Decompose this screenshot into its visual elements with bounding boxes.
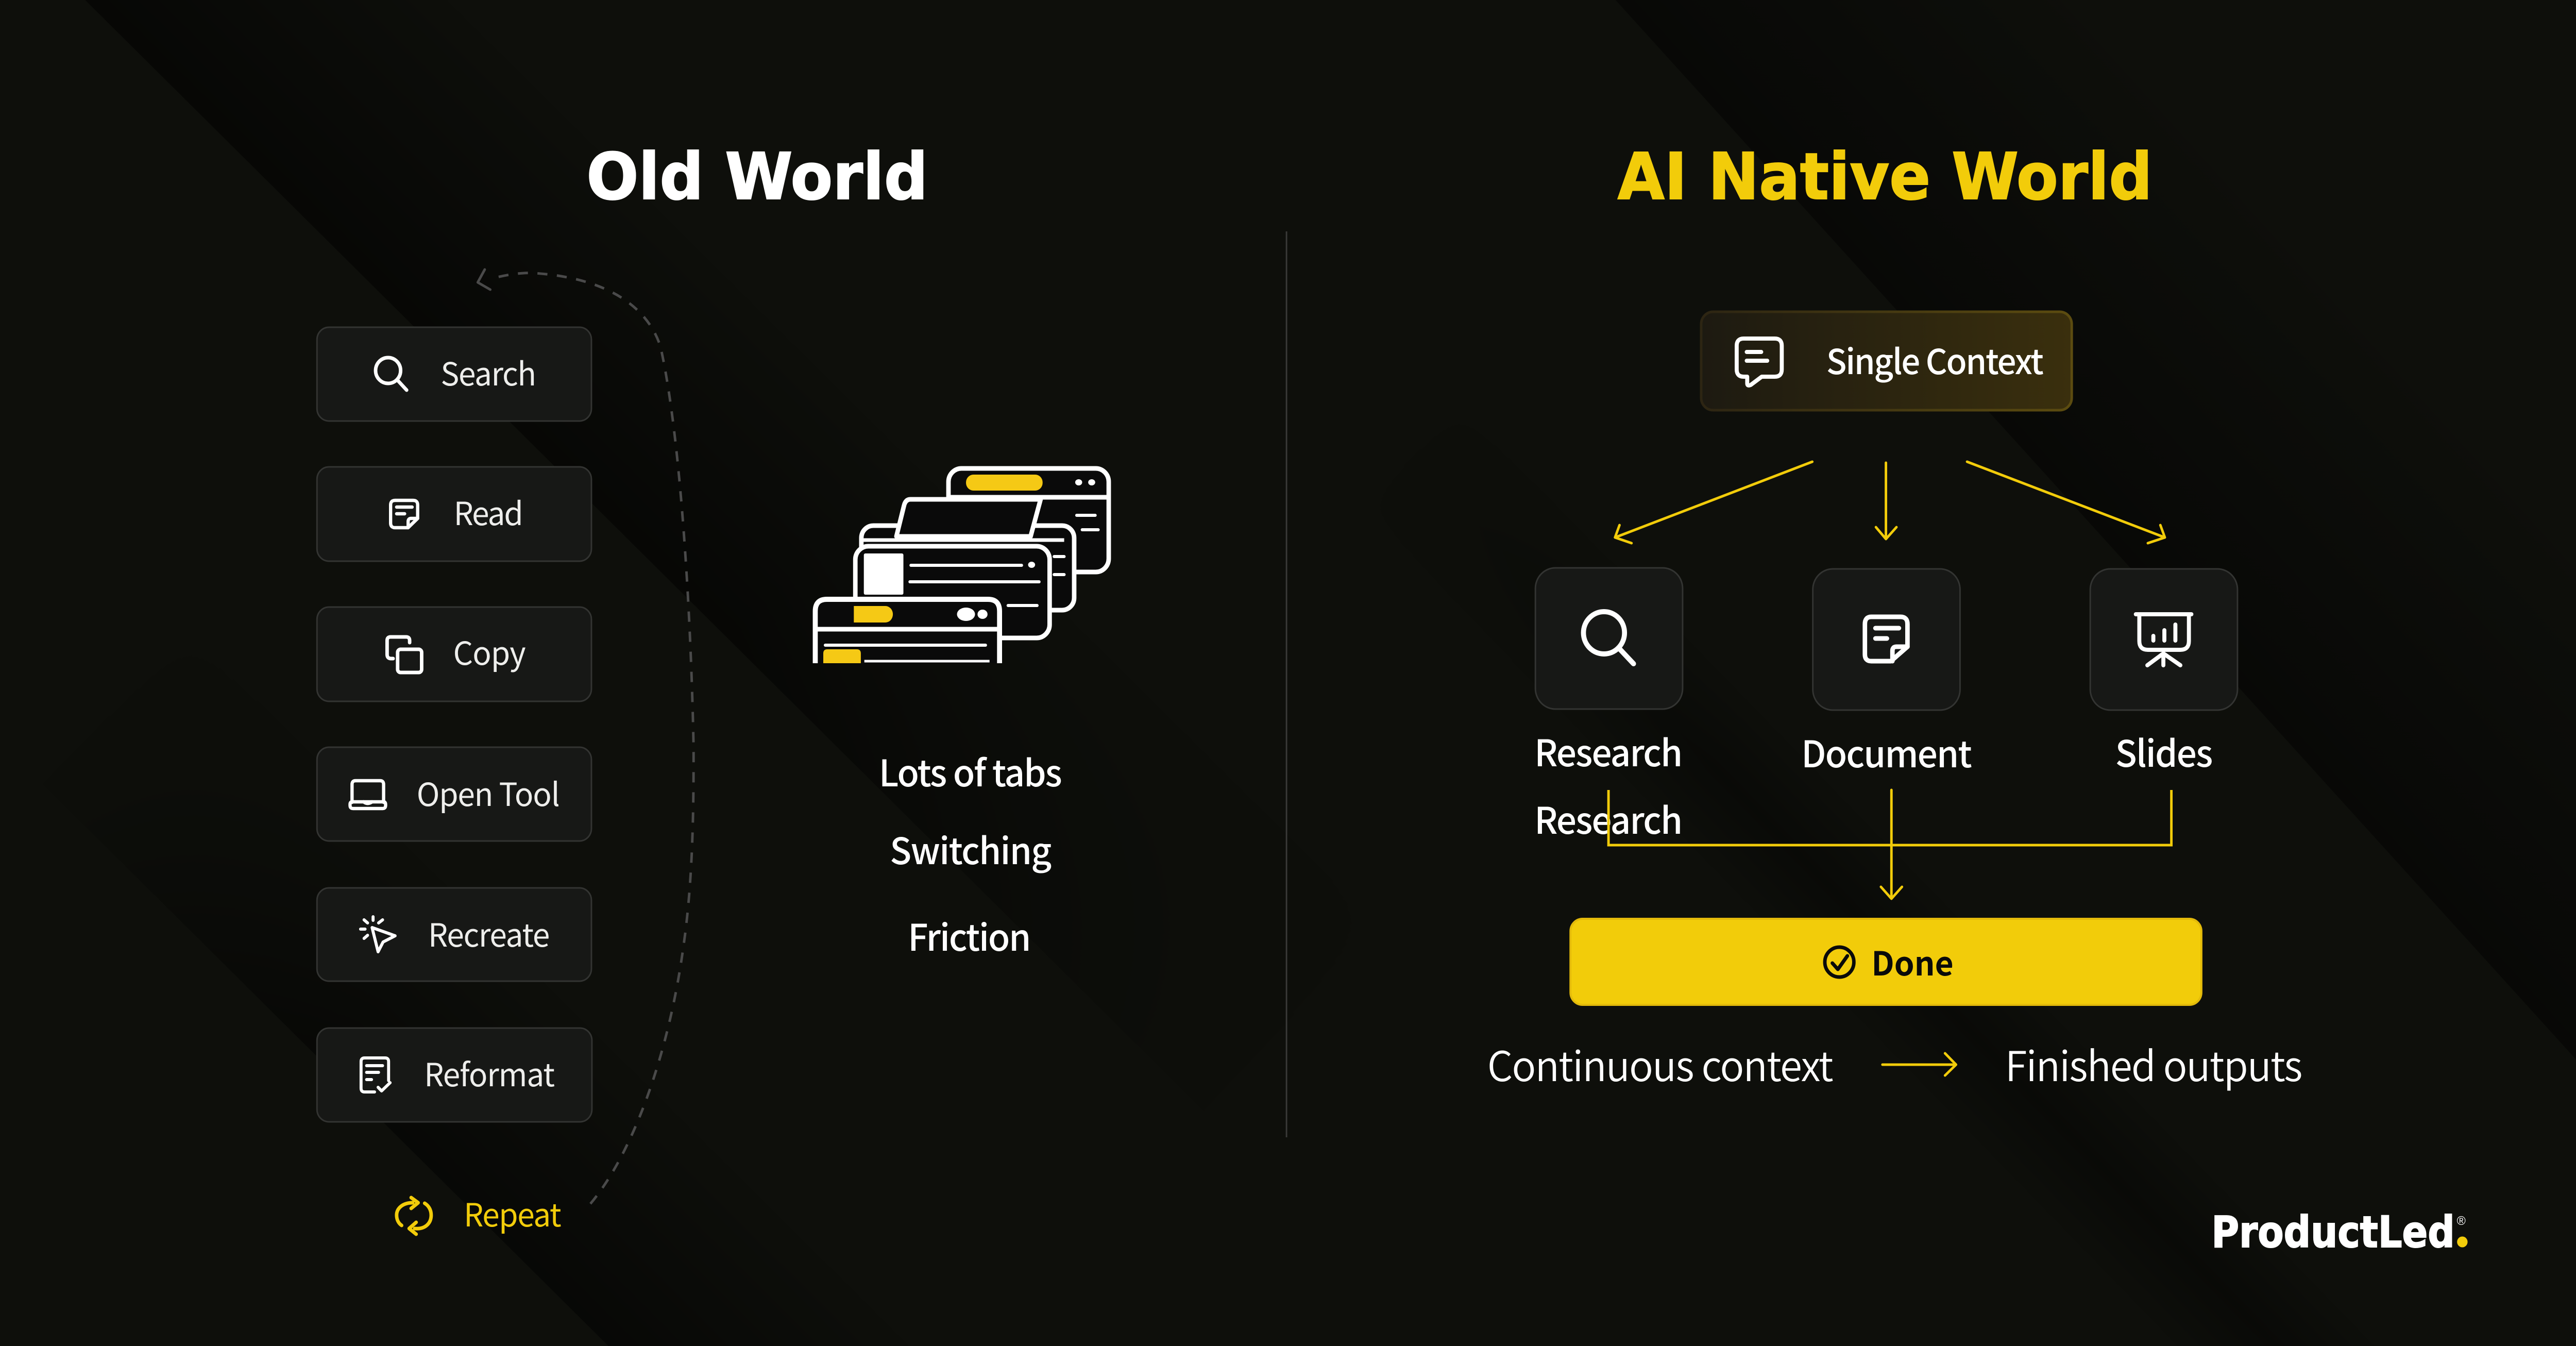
back window	[948, 468, 1109, 572]
connector into done	[1608, 790, 2172, 899]
label: done: Done	[1871, 938, 1954, 985]
duplicate label: research: Research	[1534, 792, 1683, 845]
icon: check circle	[1825, 947, 1854, 977]
third window	[861, 526, 1074, 610]
flow caption	[1487, 1033, 2302, 1093]
panel: old world	[317, 140, 1109, 1236]
icon: magnifier large	[1583, 612, 1634, 664]
tile: slides	[2090, 569, 2238, 710]
panel: ai native world	[1487, 140, 2302, 1093]
text: switching: Switching	[890, 822, 1052, 875]
step: read	[317, 467, 591, 561]
label: open tool: Open Tool	[417, 769, 560, 815]
icon: chat bubble	[1737, 339, 1782, 385]
icon: checked document	[361, 1058, 390, 1092]
text: friction: Friction	[908, 909, 1031, 962]
label: read: Read	[454, 488, 523, 534]
label: copy: Copy	[453, 628, 526, 674]
label: recreate: Recreate	[428, 910, 550, 956]
tile: research	[1535, 568, 1683, 709]
infographic canvas	[316, 149, 2468, 1248]
tile: document	[1813, 569, 1960, 710]
text: lots of tabs: Lots of tabs	[879, 745, 1062, 797]
icon: presentation board	[2136, 614, 2191, 665]
title: ai native world: AI Native World	[1618, 140, 2153, 214]
logo: productled: ProductLed	[2211, 1207, 2455, 1257]
icon: copy	[387, 637, 421, 672]
icon: document	[1865, 617, 1907, 661]
title: old world: Old World	[586, 140, 928, 214]
label: repeat: Repeat	[464, 1189, 562, 1236]
slanted window	[896, 499, 1041, 536]
label: search: Search	[440, 348, 536, 395]
text: continuous context: Continuous context	[1487, 1033, 1834, 1093]
repeat label	[397, 1189, 562, 1236]
done button	[1570, 919, 2201, 1005]
single context box	[1701, 312, 2072, 410]
step: reformat	[317, 1028, 592, 1122]
step: open tool	[317, 747, 591, 841]
divider between worlds	[1286, 231, 1287, 1137]
front window	[815, 599, 999, 663]
label: reformat: Reformat	[424, 1049, 555, 1096]
front middle window	[855, 546, 1049, 638]
label: document: Document	[1801, 726, 1972, 778]
icon: laptop	[350, 781, 385, 809]
text: finished outputs: Finished outputs	[2005, 1033, 2302, 1093]
icon: cursor click	[361, 917, 395, 952]
label: single context: Single Context	[1826, 334, 2044, 384]
label: research: Research	[1534, 725, 1683, 777]
dashed repeat loop arrow	[478, 270, 693, 1204]
illustration: stacked browser tabs	[815, 468, 1109, 663]
icon: repeat cycle	[397, 1198, 431, 1234]
icon: magnifier	[376, 358, 406, 390]
icon: note	[391, 500, 418, 528]
label: slides: Slides	[2115, 725, 2213, 778]
step: copy	[317, 607, 591, 701]
step: recreate	[317, 888, 591, 981]
arrow: to finished outputs	[1883, 1053, 1956, 1075]
step: search	[317, 327, 591, 421]
logo: productled: ®	[2457, 1215, 2466, 1228]
arrows from context to outputs	[1615, 462, 2165, 543]
